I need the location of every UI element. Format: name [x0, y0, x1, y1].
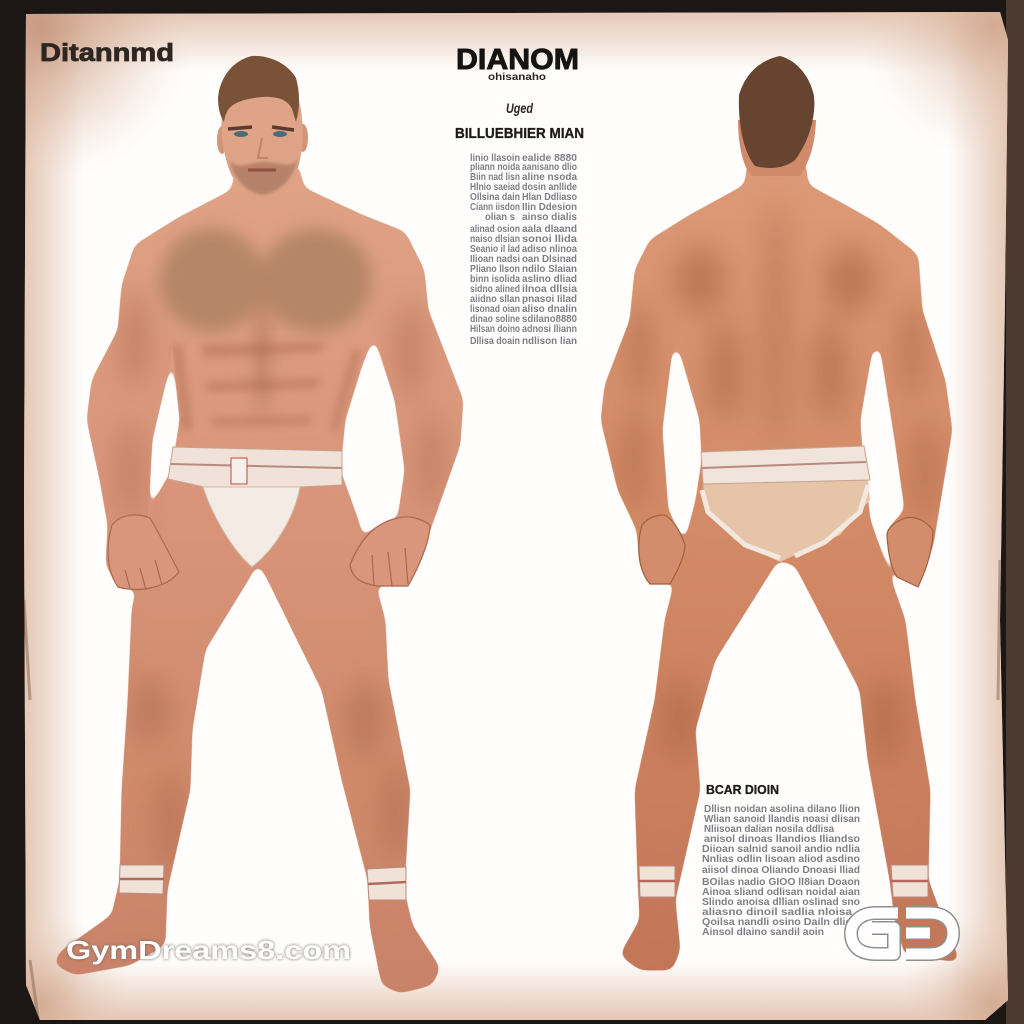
top-left label: Ditannmd [40, 39, 174, 67]
back waistband [701, 446, 870, 484]
center text block: aslino dliad [522, 274, 577, 285]
lower text block [702, 804, 860, 938]
right front hand [350, 517, 430, 586]
center text block: Hilsan doino [470, 324, 520, 335]
front body silhouette [54, 165, 463, 993]
muscle shading front [118, 228, 442, 870]
center text block: linio llasoin [470, 153, 520, 164]
watermark: GD logo [851, 913, 953, 954]
center text block: ndlison lian [522, 336, 577, 347]
back straps [702, 485, 868, 558]
lower text block: Diioan salnid sanoil andio ndlia [702, 844, 860, 855]
center text block: aala dlaand [522, 224, 577, 235]
back waistband stripe [702, 462, 866, 468]
waistband stripe [171, 464, 342, 468]
center text block: naiso dlsian [470, 234, 520, 245]
back of head [738, 120, 816, 176]
lower text block: Ainoa sliand odlisan noidal aian [702, 887, 860, 898]
center text block [470, 153, 577, 347]
center text block: Ollsina dain [470, 192, 520, 203]
lower text block: Ainsol dlaino sandil aoin [702, 927, 824, 938]
center text block: pliann noida [470, 162, 520, 173]
right back ankle band [891, 865, 928, 897]
figure: back view [601, 56, 960, 970]
center text block: Hlnio saeiad [470, 182, 520, 193]
left back ankle band [639, 866, 675, 897]
left front hand [108, 515, 179, 589]
center text block: ealide 8880 [522, 153, 577, 164]
right ankle band [367, 867, 406, 900]
lower text block: Wlian sanoid llandis noasi dlisan [704, 814, 860, 825]
right frame edge [1006, 0, 1024, 1024]
lower text block: Nliisoan dalian nosila ddlisa [704, 824, 834, 835]
center text block: aiidno sllan [470, 294, 520, 305]
left back hand [639, 515, 685, 584]
center subtitle: ohisanaho [488, 72, 546, 83]
center text block: sdilano8880 [522, 314, 577, 325]
face features [228, 127, 294, 170]
center text block: Dllisa doain [470, 336, 520, 347]
center text block: Seanio il lad [470, 244, 520, 255]
center heading: BILLUEBHIER MIAN [455, 125, 584, 142]
center text block: ilnoa dllsia [522, 284, 577, 295]
lower text block: Slindo anoisa dllian oslinad sno [702, 897, 860, 908]
hair [218, 56, 299, 122]
back body silhouette [601, 160, 960, 970]
head [221, 82, 303, 197]
front garment panel [203, 487, 300, 567]
center text block: oan Dlsinad [522, 254, 577, 265]
center text block: dosin anllide [522, 182, 577, 193]
center text block: alinad osion [470, 224, 520, 235]
lower text block: aiisol dinoa Oliando Dnoasi lliad [702, 865, 860, 876]
center text block: Ciann iisdon [470, 202, 520, 213]
back muscle shading [623, 200, 937, 760]
lower text block: aliasno dinoil sadlia nloisa [702, 907, 853, 918]
left ankle band [119, 865, 164, 894]
limb muscle shading [118, 290, 442, 870]
front waistband [168, 447, 342, 487]
center text block: sidno alined [470, 284, 520, 295]
center text block: Pliano llson [470, 264, 520, 275]
waistband tag [231, 458, 247, 484]
abdominal muscle shading [172, 342, 362, 430]
ears [217, 124, 308, 154]
center text block: dinao soline [470, 314, 520, 325]
center text block: binn isolida [470, 274, 520, 285]
center title: DIANOM [456, 44, 579, 76]
center text block: sonoi llida [522, 234, 577, 245]
center text block: Biin nad lisn [470, 172, 520, 183]
center text block: adnosi lliann [522, 324, 577, 335]
center text block: aanisano dlio [522, 162, 577, 173]
figure: front view [54, 56, 463, 993]
lower text block: Qoilsa nandli osino Dailn dlio [702, 917, 852, 928]
center text block: aliso dnalin [522, 304, 577, 315]
front finger lines [125, 548, 408, 590]
stubble [230, 158, 298, 195]
lower text block: BOilas nadio GIOO ll8ian Doaon [702, 877, 860, 888]
lower text heading: BCAR DIOIN [706, 782, 779, 797]
center text block: lisonad oian [470, 304, 520, 315]
center text block: Ilioan nadsi [470, 254, 520, 265]
right back hand [887, 518, 933, 587]
center text block: IIin Ddesion [522, 202, 577, 213]
lower text block: Nnlias odlin lisoan aliod asdino [702, 854, 860, 865]
lower text block: anisol dinoas llandios Iliandso [704, 834, 860, 845]
lower text block: Dllisn noidan asolina dilano llion [704, 804, 860, 815]
center text block: Hlan Ddliaso [522, 192, 577, 203]
center text block: pnasoi Iilad [522, 294, 577, 305]
center text block: aline nsoda [522, 172, 577, 183]
center text block: adiso nlinoa [522, 244, 577, 255]
watermark: site name: GymDreams8.com [66, 935, 351, 965]
center text block: ndilo Slaian [522, 264, 577, 275]
center text block: ainso dialis [522, 212, 577, 223]
lower back panel [703, 480, 870, 562]
center text block: olian s [485, 212, 515, 223]
back hair [739, 56, 814, 168]
chest hair shading [160, 228, 372, 415]
center small script mark: Uged [506, 100, 533, 116]
